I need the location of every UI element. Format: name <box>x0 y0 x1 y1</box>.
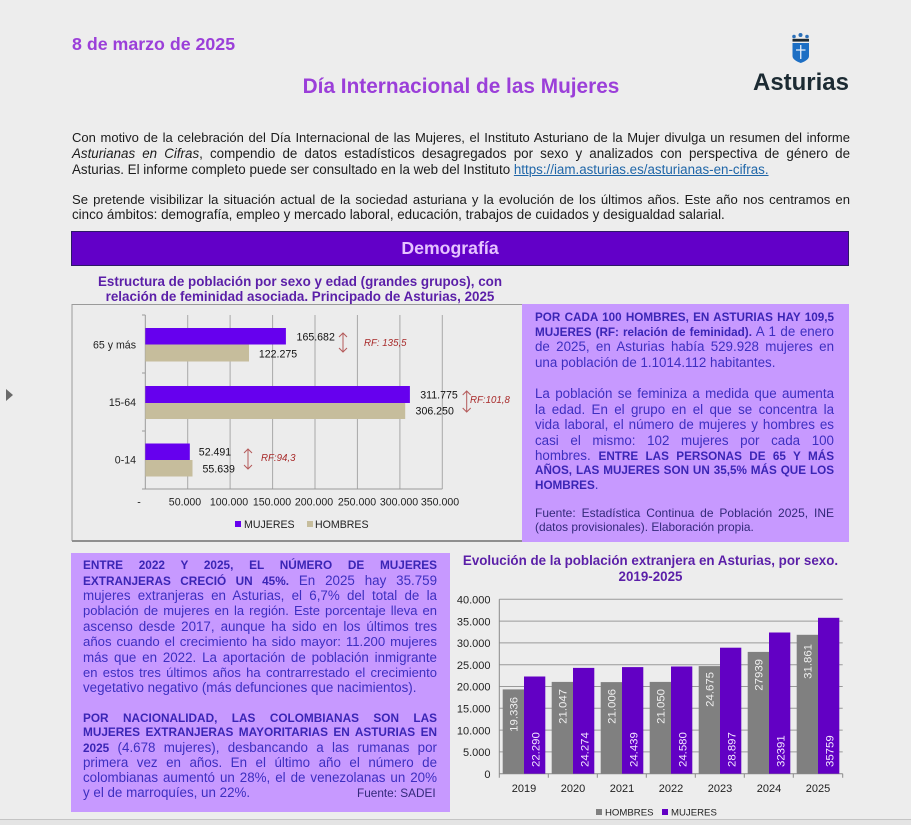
panel: foreign women text <box>71 553 450 812</box>
bars: 0-14 <box>145 444 192 476</box>
year labels: 2023 <box>708 783 732 795</box>
data labels: mujeres: 22.290 <box>530 732 542 767</box>
paragraph: growth: más que en 2022. La aportación de población inmigrante <box>83 650 437 665</box>
paragraph: growth: en estos tres últimos años ha contrarrestado el crecimiento <box>83 665 437 680</box>
feminity ratio labels <box>261 338 510 464</box>
intro paragraph 2: cinco ámbitos: demografía, empleo y mercado laboral, educación, trabajos de cuidados y desigualdad salarial. <box>72 207 725 222</box>
data labels: mujeres: 32391 <box>776 735 788 767</box>
data labels: mujeres: 24.439 <box>628 732 640 767</box>
y axis labels: 0 <box>484 769 490 781</box>
data labels: mujeres <box>530 732 836 767</box>
feminity ratio labels: RF:94,3 <box>261 453 296 464</box>
source note: Fuente: SADEI <box>357 786 436 800</box>
category labels: 0-14 <box>115 454 136 466</box>
x axis labels: - <box>137 496 141 508</box>
paragraph: growth: ENTRE 2022 Y 2025, EL NÚMERO DE MUJERES <box>83 558 437 572</box>
feminity ratio labels: RF:101,8 <box>470 395 510 406</box>
icon: side arrow <box>6 389 13 401</box>
bars: 65 y más <box>145 328 286 362</box>
main title: Día Internacional de las Mujeres <box>303 75 619 98</box>
paragraph: nationality <box>83 711 437 800</box>
data labels: hombres: 24.675 <box>704 672 716 707</box>
source note: Fuente: Estadística Continua de Población 2025, INE <box>535 506 834 520</box>
year labels: 2021 <box>610 783 634 795</box>
paragraph: growth: población de mujeres en la región. Este porcentaje lleva en <box>83 603 437 618</box>
paragraph: ageing: HOMBRES. <box>535 477 598 492</box>
year labels: 2024 <box>757 783 781 795</box>
x axis labels: 350.000 <box>421 496 459 508</box>
data labels: 306.250 <box>416 406 454 418</box>
data labels: hombres: 21.047 <box>558 689 570 724</box>
year labels: 2025 <box>806 783 830 795</box>
data labels: mujeres: 28.897 <box>726 732 738 767</box>
panel: feminity text <box>522 304 849 542</box>
bars: mujeres <box>524 618 839 774</box>
feminity ratio labels: RF: 135,5 <box>364 338 407 349</box>
intro paragraph 2: Se pretende visibilizar la situación actual de la sociedad asturiana y la evolución de los últimos años. Este año nos centramos en <box>72 192 850 207</box>
year labels: 2019 <box>512 783 536 795</box>
bars: hombres <box>503 635 818 774</box>
intro paragraph 1: Asturias. El informe completo puede ser consultado en la web del Instituto https://iam.asturias.es/asturianas-en-cifras. <box>72 162 769 176</box>
section banner: Demografía: Demografía <box>401 238 499 258</box>
data labels: 52.491 <box>199 446 231 458</box>
legend: HOMBRES <box>605 808 654 818</box>
paragraph: growth: mujeres extranjeras en Asturias, el 6,7% del total de la <box>83 588 437 603</box>
source note: (datos provisionales). Elaboración propia. <box>535 520 754 534</box>
chart 2 title: Evolución de la población extranjera en Asturias, por sexo. <box>463 553 838 568</box>
source note <box>535 506 834 534</box>
y axis labels: 10.000 <box>457 725 490 737</box>
x axis labels: 100.000 <box>210 496 248 508</box>
paragraph: feminity ratio: POR CADA 100 HOMBRES, EN ASTURIAS HAY 109,5 <box>535 311 834 324</box>
intro paragraph 1: Con motivo de la celebración del Día Internacional de las Mujeres, el Instituto Asturiano de la Mujer divulga un resumen del informe <box>72 130 850 145</box>
category labels <box>93 340 136 466</box>
chart 2 title: 2019-2025 <box>619 568 682 584</box>
paragraph: ageing <box>535 386 834 492</box>
data labels: 311.775 <box>420 390 458 402</box>
data labels: 55.639 <box>202 464 235 476</box>
logo wordmark: Asturias <box>753 69 849 96</box>
icon: crown and shield <box>792 33 809 63</box>
chart 1 title <box>98 274 502 304</box>
paragraph: growth <box>83 558 437 695</box>
data labels: mujeres: 35759 <box>824 735 836 767</box>
chart 1 title: Estructura de población por sexo y edad (grandes grupos), con <box>98 274 502 289</box>
arrows: feminity ratio <box>244 333 471 469</box>
y axis labels: 25.000 <box>457 660 490 672</box>
data labels <box>199 332 458 476</box>
paragraph: growth: vegetativo negativo (más defunciones que nacimientos). <box>83 680 416 695</box>
category labels: 15-64 <box>109 397 136 409</box>
paragraph: ageing: la edad. En el grupo en el que se concentra la <box>535 402 834 417</box>
data labels: hombres: 21.006 <box>606 689 618 724</box>
paragraph: nationality: 2025 (4.678 mujeres), desbancando a las rumanas por <box>83 740 437 755</box>
legend <box>596 808 717 818</box>
date heading: 8 de marzo de 2025 <box>72 34 235 54</box>
data labels: 122.275 <box>259 348 297 360</box>
paragraph: nationality: y el de marroquíes, un 22%. <box>83 785 250 800</box>
data labels: hombres: 31.861 <box>802 644 814 679</box>
legend: MUJERES <box>244 519 295 531</box>
paragraph: nationality: primera vez en años. En el último año el número de <box>83 754 437 770</box>
y axis labels <box>457 594 490 781</box>
paragraph: feminity ratio: de 2025, en Asturias había 529.928 mujeres en <box>535 339 834 354</box>
bars: 15-64 <box>145 386 410 419</box>
paragraph: nationality: MUJERES EXTRANJERAS MAYORITARIAS EN ASTURIAS EN <box>83 725 437 739</box>
category labels: 65 y más <box>93 340 136 352</box>
legend: HOMBRES <box>315 519 369 531</box>
paragraph: nationality: POR NACIONALIDAD, LAS COLOMBIANAS SON LAS <box>83 711 437 725</box>
chart: foreign population by sex <box>457 594 844 818</box>
y axis labels: 40.000 <box>457 594 490 606</box>
paragraph: ageing: AÑOS, LAS MUJERES SON UN 35,5% MÁS QUE LOS <box>535 464 834 477</box>
paragraph: feminity ratio: MUJERES (RF: relación de feminidad). A 1 de enero <box>535 324 834 339</box>
data labels: 165.682 <box>297 332 335 344</box>
x axis labels: 250.000 <box>338 496 376 508</box>
panel: population bar chart <box>72 304 522 542</box>
paragraph: ageing: hombres. ENTRE LAS PERSONAS DE 65 Y MÁS <box>535 448 834 463</box>
year labels: 2020 <box>561 783 585 795</box>
data labels: hombres: 19.336 <box>508 697 520 732</box>
paragraph: feminity ratio <box>535 311 834 370</box>
paragraph: ageing: vida laboral, el número de mujeres y hombres es <box>535 417 834 432</box>
paragraph: nationality: colombianas aumentó un 28%, el de venezolanas un 20% <box>83 770 437 785</box>
data labels: mujeres: 24.274 <box>580 732 592 767</box>
y axis labels: 30.000 <box>457 638 490 650</box>
y axis labels: 15.000 <box>457 704 490 716</box>
chart 1 title: relación de feminidad asociada. Principado de Asturias, 2025 <box>106 289 494 304</box>
year labels: 2022 <box>659 783 683 795</box>
intro paragraph 2 <box>72 192 850 222</box>
legend: MUJERES <box>671 808 717 818</box>
paragraph: ageing: casi el mismo: 102 mujeres por cada 100 <box>535 433 834 448</box>
x axis labels: 300.000 <box>380 496 418 508</box>
intro paragraph 1: Asturianas en Cifras, compendio de datos estadísticos desagregados por sexo y analizados con perspectiva de género de <box>72 146 850 161</box>
paragraph: ageing: La población se feminiza a medida que aumenta <box>535 386 834 401</box>
paragraph: feminity ratio: una población de 1.1014.112 habitantes. <box>535 355 775 370</box>
legend <box>235 519 369 531</box>
data labels: hombres <box>508 644 814 732</box>
y axis labels: 35.000 <box>457 616 490 628</box>
paragraph: growth: EXTRANJERAS CRECIÓ UN 45%. En 2025 hay 35.759 <box>83 573 437 588</box>
y axis labels: 20.000 <box>457 682 490 694</box>
intro paragraph 1 <box>71 130 850 177</box>
paragraph: growth: ascenso desde 2017, aunque ha sido en los últimos tres <box>83 618 437 634</box>
year labels <box>512 783 830 795</box>
x axis labels <box>137 496 459 508</box>
logo: Asturias <box>753 33 849 96</box>
x axis labels: 50.000 <box>169 496 201 508</box>
y axis labels: 5.000 <box>463 747 490 759</box>
data labels: hombres: 21.050 <box>656 689 668 724</box>
data labels: mujeres: 24.580 <box>678 732 690 767</box>
x axis labels: 200.000 <box>295 496 333 508</box>
paragraph: growth: años cuando el crecimiento ha sido mayor: 11.200 mujeres <box>83 634 437 649</box>
x axis labels: 150.000 <box>253 496 291 508</box>
intro text <box>71 130 850 222</box>
section banner: Demografía <box>71 231 849 266</box>
chart 2 title <box>463 553 838 584</box>
data labels: hombres: 27939 <box>754 659 766 691</box>
